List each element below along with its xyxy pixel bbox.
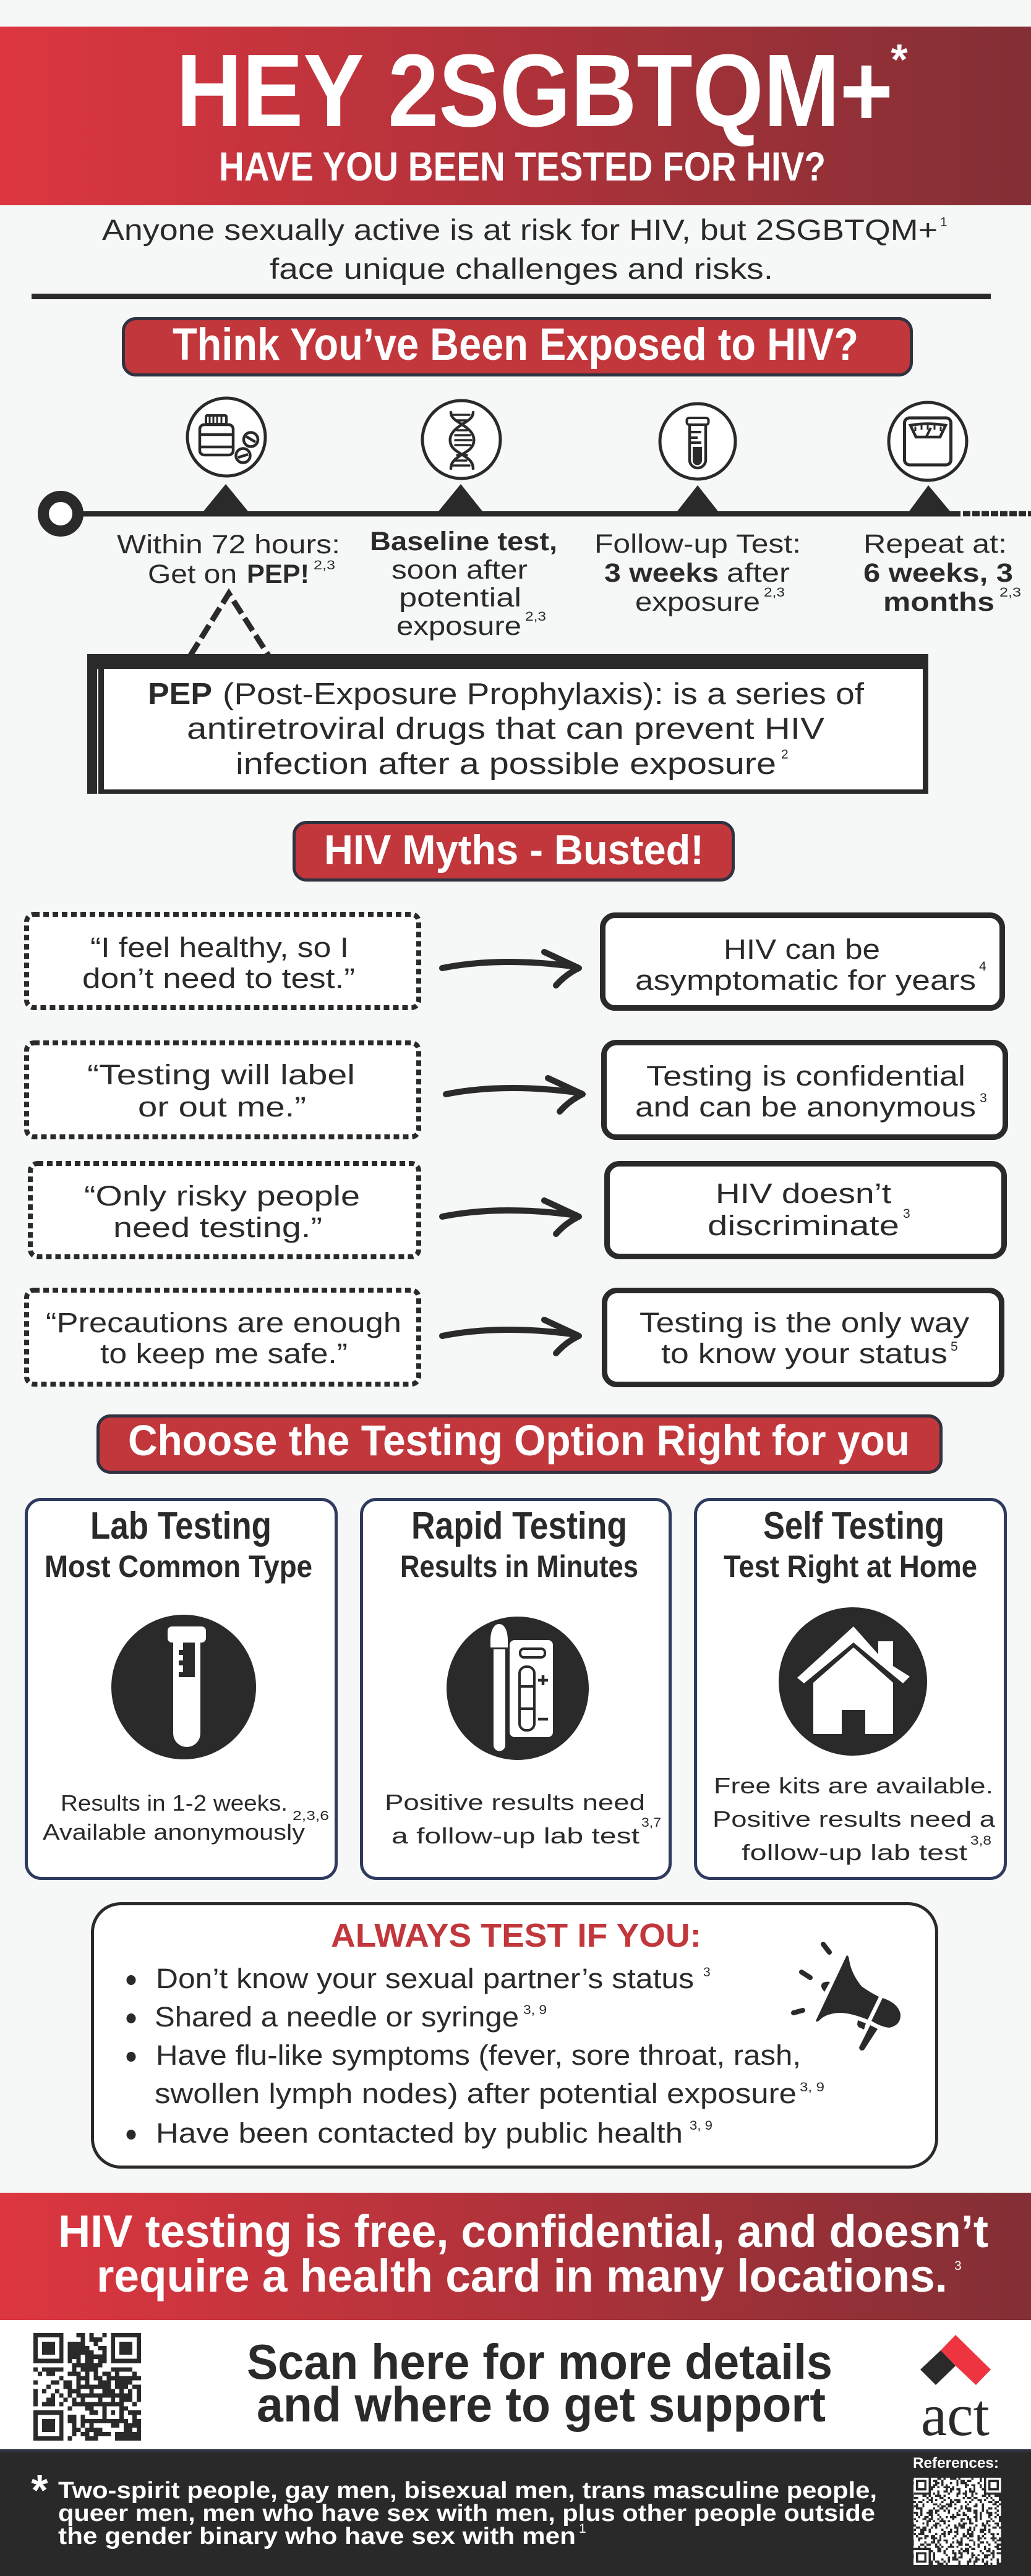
panel heading: ALWAYS TEST IF YOU: [331, 1917, 701, 1954]
bullet list: 3 [703, 1965, 711, 1979]
fact: 4 [979, 959, 986, 974]
references label: References: [913, 2455, 999, 2472]
card text: 3,8 [970, 1834, 991, 1848]
callout: PEP definition: infection after a possible exposure [236, 747, 776, 781]
footer asterisk: * [31, 2466, 48, 2514]
timeline step: PEP: Within 72 hours: [117, 530, 340, 559]
heading: testing options: Choose the Testing Option Right for you [128, 1416, 910, 1464]
myth row 2 [27, 1042, 1006, 1137]
myth: “I feel healthy, so I [90, 932, 349, 963]
subtitle: HAVE YOU BEEN TESTED FOR HIV? [219, 143, 826, 189]
timeline [43, 398, 1031, 641]
panel: scan band [0, 2320, 1031, 2449]
myth: don’t need to test.” [82, 963, 355, 994]
arrow [442, 952, 579, 985]
title: HEY 2SGBTQM+ [176, 33, 893, 148]
timeline step: repeat: 6 weeks, 3 [863, 558, 1013, 588]
icon: pill bottle [187, 398, 265, 476]
callout: PEP definition: 2 [781, 747, 789, 762]
card text: Positive results need [385, 1790, 645, 1815]
logo: act: act [921, 2382, 990, 2448]
myth: or out me.” [138, 1091, 306, 1123]
fact: 3 [980, 1091, 987, 1105]
header banner [0, 27, 1031, 205]
banner: testing is free: 3 [954, 2259, 962, 2273]
scan text: Scan here for more details [247, 2334, 832, 2389]
myth: need testing.” [113, 1212, 322, 1243]
bullet list: 3, 9 [523, 2003, 547, 2017]
footnote text: 1 [579, 2522, 586, 2536]
timeline step: baseline: soon after [391, 555, 528, 585]
card title: Lab Testing [90, 1505, 272, 1547]
fact: 3 [903, 1207, 910, 1221]
callout: PEP definition [87, 593, 928, 794]
icon: test tube [660, 404, 735, 479]
QR code [33, 2333, 141, 2441]
timeline step: repeat: months [883, 587, 995, 617]
card text [712, 1773, 996, 1865]
fact: Testing is the only way [640, 1307, 970, 1338]
icon: house [779, 1607, 927, 1756]
timeline step: PEP: Get on [148, 559, 237, 589]
timeline step: follow-up: after [727, 558, 790, 588]
fact [602, 915, 1002, 1008]
card text: Available anonymously [43, 1819, 305, 1845]
fact [604, 1042, 1006, 1137]
icon: test tube [111, 1615, 256, 1759]
myth: “Only risky people [84, 1180, 360, 1212]
bullet list: Have been contacted by public health [156, 2117, 683, 2149]
timeline step: follow-up: exposure [635, 587, 760, 617]
timeline start ring [43, 496, 78, 531]
panel: self testing [695, 1500, 1006, 1878]
icon: dna [422, 401, 500, 478]
panel: always test [93, 1904, 936, 2167]
myth: “Precautions are enough [46, 1307, 401, 1338]
fact: to know your status [661, 1338, 948, 1369]
timeline step: follow-up: 3 weeks [604, 558, 719, 588]
fact: HIV can be [724, 933, 880, 965]
fact: and can be anonymous [635, 1091, 976, 1123]
timeline step: PEP: PEP! [247, 559, 309, 589]
card text: 2,3,6 [293, 1809, 329, 1823]
fact [605, 1291, 1002, 1385]
bullet list [126, 1963, 824, 2149]
card text [43, 1790, 329, 1845]
myth [27, 1290, 419, 1384]
timeline step: PEP [117, 530, 340, 589]
card text: 3,7 [641, 1816, 661, 1830]
card title: Rapid Testing [411, 1505, 627, 1547]
card subtitle: Results in Minutes [400, 1549, 638, 1584]
bullet list: 3, 9 [800, 2080, 824, 2094]
banner: testing is free: HIV testing is free, confidential, and doesn’t [58, 2206, 988, 2257]
arrow [442, 1201, 579, 1234]
arrow [446, 1078, 583, 1112]
intro text: Anyone sexually active is at risk for HIV, but 2SGBTQM+ [102, 213, 938, 246]
timeline step: baseline: Baseline test, [370, 527, 557, 556]
myth [27, 914, 419, 1008]
timeline step: repeat [863, 529, 1021, 617]
fact: discriminate [708, 1210, 899, 1241]
banner: testing is free: require a health card in many locations. [96, 2250, 948, 2302]
bullet list: Shared a needle or syringe [155, 2001, 519, 2033]
bullet list: swollen lymph nodes) after potential exposure [155, 2078, 797, 2109]
timeline step: PEP: 2,3 [314, 558, 335, 572]
footnote text: the gender binary who have sex with men [58, 2523, 576, 2549]
fact: HIV doesn’t [716, 1178, 892, 1209]
myth row 4 [27, 1290, 1002, 1385]
myth row 3 [30, 1163, 1004, 1257]
fact: Testing is confidential [646, 1060, 965, 1092]
fact: 5 [951, 1340, 958, 1354]
timeline step: baseline: exposure [396, 611, 521, 641]
icon: scale [889, 402, 967, 480]
callout: PEP definition: antiretroviral drugs that can prevent HIV [187, 712, 824, 746]
timeline step: follow-up [594, 529, 801, 617]
panel: lab testing [26, 1500, 336, 1878]
card text: follow-up lab test [742, 1840, 967, 1865]
icon: rapid test [447, 1617, 589, 1760]
callout: PEP definition: PEP [148, 678, 212, 711]
myth [27, 1043, 419, 1137]
footnote text [58, 2478, 877, 2549]
fact [607, 1163, 1004, 1256]
card text: a follow-up lab test [391, 1823, 640, 1848]
footnote text: queer men, men who have sex with men, plus other people outside [58, 2501, 875, 2527]
timeline step: baseline: potential [399, 583, 521, 613]
heading: myths: HIV Myths - Busted! [324, 827, 704, 874]
footer panel [0, 2449, 1031, 2576]
scan text: and where to get support [257, 2377, 826, 2432]
scan text [247, 2334, 832, 2432]
card subtitle: Test Right at Home [724, 1549, 977, 1584]
myth: to keep me safe.” [100, 1338, 348, 1369]
bullet list: Don’t know your sexual partner’s status [156, 1963, 694, 1994]
timeline step: baseline [370, 527, 557, 641]
card text [385, 1790, 661, 1848]
timeline step: repeat: 2,3 [999, 585, 1021, 600]
timeline step: follow-up: 2,3 [764, 585, 785, 600]
card text: Free kits are available. [714, 1773, 993, 1798]
myth row 1 [27, 914, 1002, 1008]
heading: exposed: Think You’ve Been Exposed to HIV? [173, 320, 858, 370]
myth: “Testing will label [87, 1059, 355, 1090]
arrow [442, 1320, 579, 1353]
icon: megaphone [794, 1944, 901, 2051]
card subtitle: Most Common Type [45, 1549, 312, 1584]
intro text: 1 [940, 215, 948, 229]
references QR code [913, 2478, 1001, 2565]
logo: act [920, 2335, 991, 2448]
banner: testing is free [0, 2193, 1031, 2320]
callout: PEP definition: (Post-Exposure Prophylaxis): is a series of [223, 678, 864, 711]
card text: Positive results need a [712, 1806, 996, 1832]
fact: asymptomatic for years [635, 964, 976, 996]
timeline markers [203, 484, 950, 511]
card title: Self Testing [763, 1505, 944, 1547]
bullet list: 3, 9 [690, 2119, 712, 2133]
card text: Results in 1-2 weeks. [61, 1790, 288, 1816]
timeline step: repeat: Repeat at: [863, 529, 1007, 559]
footnote text: Two-spirit people, gay men, bisexual men, trans masculine people, [58, 2478, 877, 2504]
intro text: face unique challenges and risks. [270, 252, 773, 285]
bullet list: Have flu-like symptoms (fever, sore throat, rash, [156, 2039, 801, 2071]
dashed pointer [190, 593, 268, 655]
timeline line [79, 511, 960, 517]
timeline step: baseline: 2,3 [525, 610, 546, 624]
intro text [102, 213, 948, 285]
title asterisk: * [891, 35, 908, 83]
timeline step: follow-up: Follow-up Test: [594, 529, 801, 559]
panel: rapid testing [361, 1500, 670, 1878]
myth [30, 1163, 419, 1257]
